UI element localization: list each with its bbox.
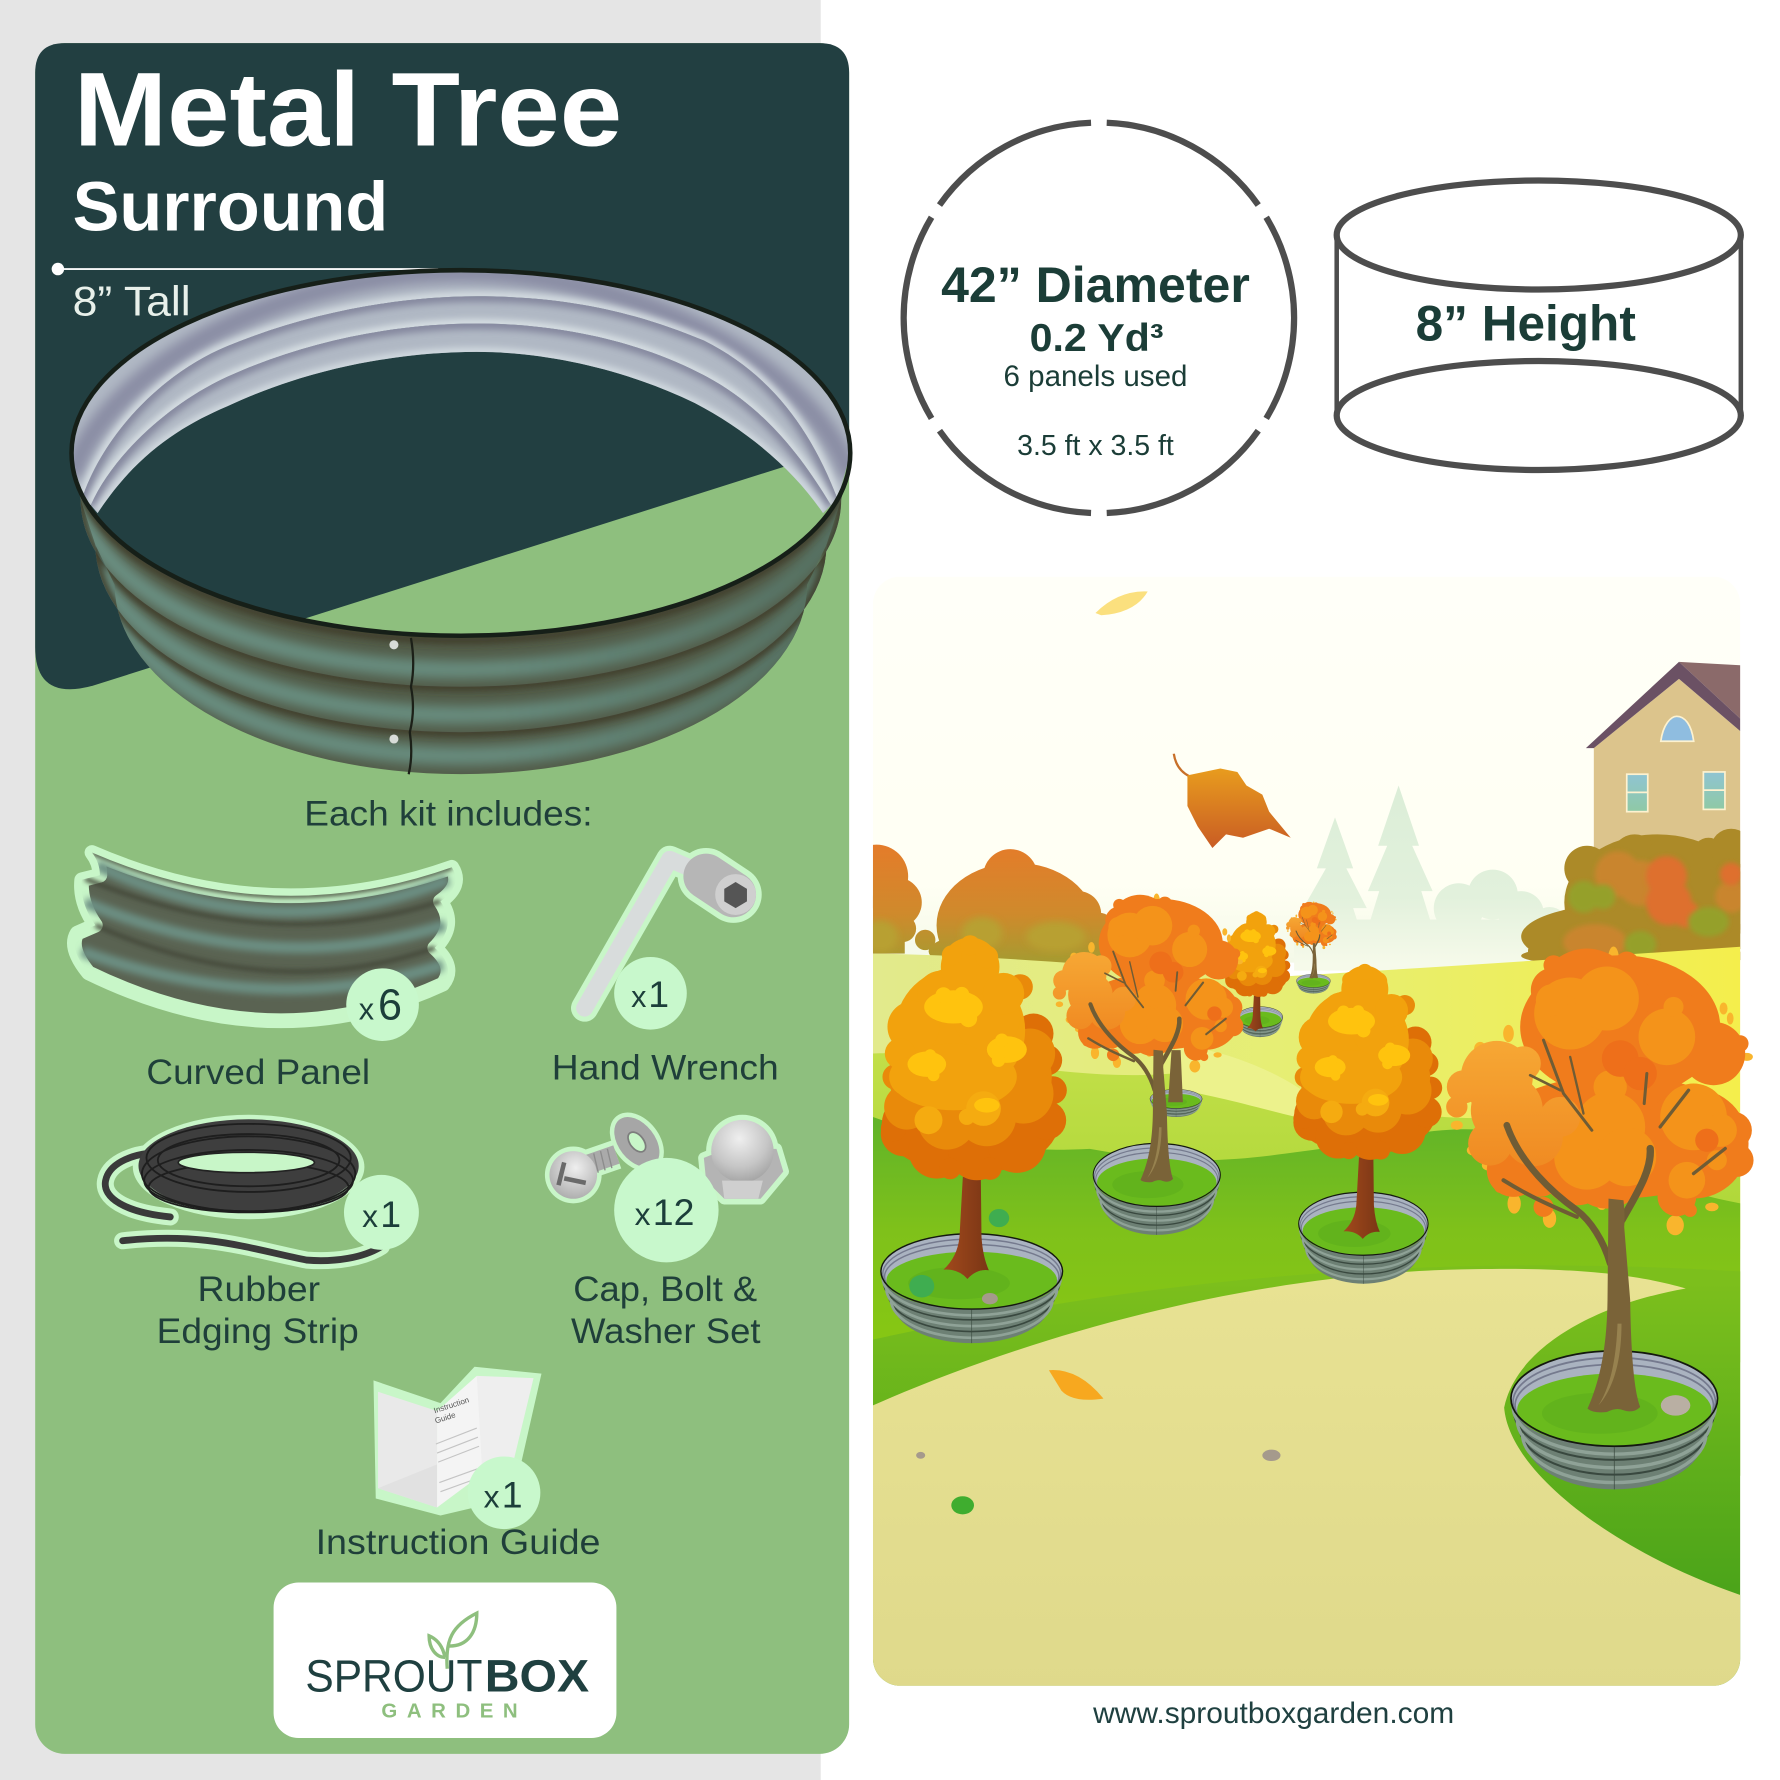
- pale path on hill: [1175, 1048, 1300, 1116]
- label: curved panel: Curved Panel: [146, 1053, 370, 1092]
- kit heading: Each kit includes:: [304, 794, 593, 833]
- badge: guide x1: [468, 1456, 540, 1529]
- badge: wrench x1: [614, 957, 687, 1030]
- icon: falling leaf: [1174, 754, 1291, 848]
- icon: rubber edging strip: [105, 1115, 381, 1261]
- height marker line: [52, 263, 438, 275]
- badge: x6: 6: [378, 981, 402, 1029]
- label: rubber edging strip: Edging Strip: [157, 1312, 359, 1351]
- badge: x6: [346, 968, 419, 1041]
- height diagram: [1337, 180, 1741, 470]
- panel: autumn garden scene: [845, 577, 1765, 1691]
- icon: cap, bolt and washer: [545, 1102, 783, 1203]
- label: cap, bolt and washer: Washer Set: [571, 1312, 761, 1351]
- gravel path: [873, 1269, 1740, 1691]
- large branching tree in ring: [1446, 947, 1754, 1489]
- logo card: SPROUT: [305, 1650, 482, 1701]
- icon: instruction guide: Instruction: [433, 1395, 470, 1415]
- label: instruction guide: Instruction Guide: [316, 1523, 601, 1562]
- logo card: BOX: [485, 1650, 589, 1701]
- back hill: [873, 947, 1740, 1249]
- label: rubber edging strip: [157, 1270, 359, 1351]
- tree behind second ring: [1150, 1050, 1202, 1117]
- rounded tree in ring, first: [881, 935, 1067, 1343]
- front hill: [873, 1117, 1740, 1476]
- autumn bushes: [845, 829, 1765, 988]
- segmented circle: [904, 123, 1294, 513]
- badge: wrench x1: 1: [648, 973, 669, 1015]
- diameter text: [941, 257, 1250, 462]
- icon: yellow leaf: [1095, 591, 1148, 615]
- badge: x12: x: [635, 1196, 651, 1232]
- branching tree in ring, second: [1053, 893, 1243, 1235]
- icon: hand wrench: [585, 859, 756, 1008]
- diameter text: 42” Diameter: [941, 257, 1250, 313]
- diameter text: 0.2 Yd³: [1030, 317, 1164, 360]
- logo card: GARDEN: [381, 1701, 518, 1723]
- logo card: [274, 1582, 616, 1738]
- icon: instruction guide: [373, 1367, 541, 1515]
- badge: guide x1: x: [484, 1479, 500, 1515]
- badge: strip x1: x: [362, 1198, 378, 1234]
- title: [73, 51, 622, 245]
- badge: strip x1: 1: [380, 1193, 401, 1235]
- label: cap, bolt and washer: Cap, Bolt &: [573, 1270, 757, 1309]
- badge: wrench x1: x: [631, 980, 647, 1014]
- far rounded tree and ring: [1225, 911, 1290, 1037]
- icon: instruction guide: Guide: [434, 1410, 457, 1425]
- badge: strip x1: [344, 1175, 419, 1250]
- title: Surround: [73, 167, 388, 245]
- badge: x12: [614, 1158, 719, 1262]
- dark header shape: [35, 43, 849, 689]
- badge: x12: 12: [653, 1191, 694, 1233]
- sky: [873, 639, 1740, 962]
- icon: orange leaf: [1049, 1370, 1103, 1400]
- diameter text: 3.5 ft x 3.5 ft: [1017, 430, 1174, 462]
- diameter text: 6 panels used: [1004, 360, 1187, 393]
- lawn: [873, 1265, 1740, 1686]
- height text: 8” Height: [1416, 296, 1636, 352]
- grey background strip: [0, 0, 821, 1780]
- house: [1586, 662, 1740, 874]
- middle hill: [873, 1053, 1740, 1362]
- label: hand wrench: Hand Wrench: [552, 1049, 779, 1088]
- label: cap, bolt and washer: [571, 1270, 761, 1351]
- panel: product and kit contents: [35, 43, 857, 1754]
- badge: guide x1: 1: [502, 1474, 523, 1516]
- badge: x6: x: [359, 992, 374, 1026]
- icon: curved panel: [74, 853, 456, 1021]
- rounded tree in ring, third: [1293, 964, 1442, 1284]
- distant pines and bushes: [1294, 786, 1568, 971]
- label: rubber edging strip: Rubber: [198, 1270, 320, 1309]
- icon: sprout: [429, 1613, 477, 1669]
- small far tree and ring: [1286, 902, 1337, 994]
- diameter diagram: [904, 123, 1294, 513]
- interior surface: [74, 272, 848, 496]
- rocks and shrubs: [916, 1209, 1281, 1514]
- cylinder outline: [1337, 180, 1741, 470]
- title: Metal Tree: [74, 51, 622, 168]
- metal ring illustration: [62, 261, 857, 774]
- website: www.sproutboxgarden.com: [1092, 1697, 1454, 1730]
- height label: 8” Tall: [73, 278, 191, 325]
